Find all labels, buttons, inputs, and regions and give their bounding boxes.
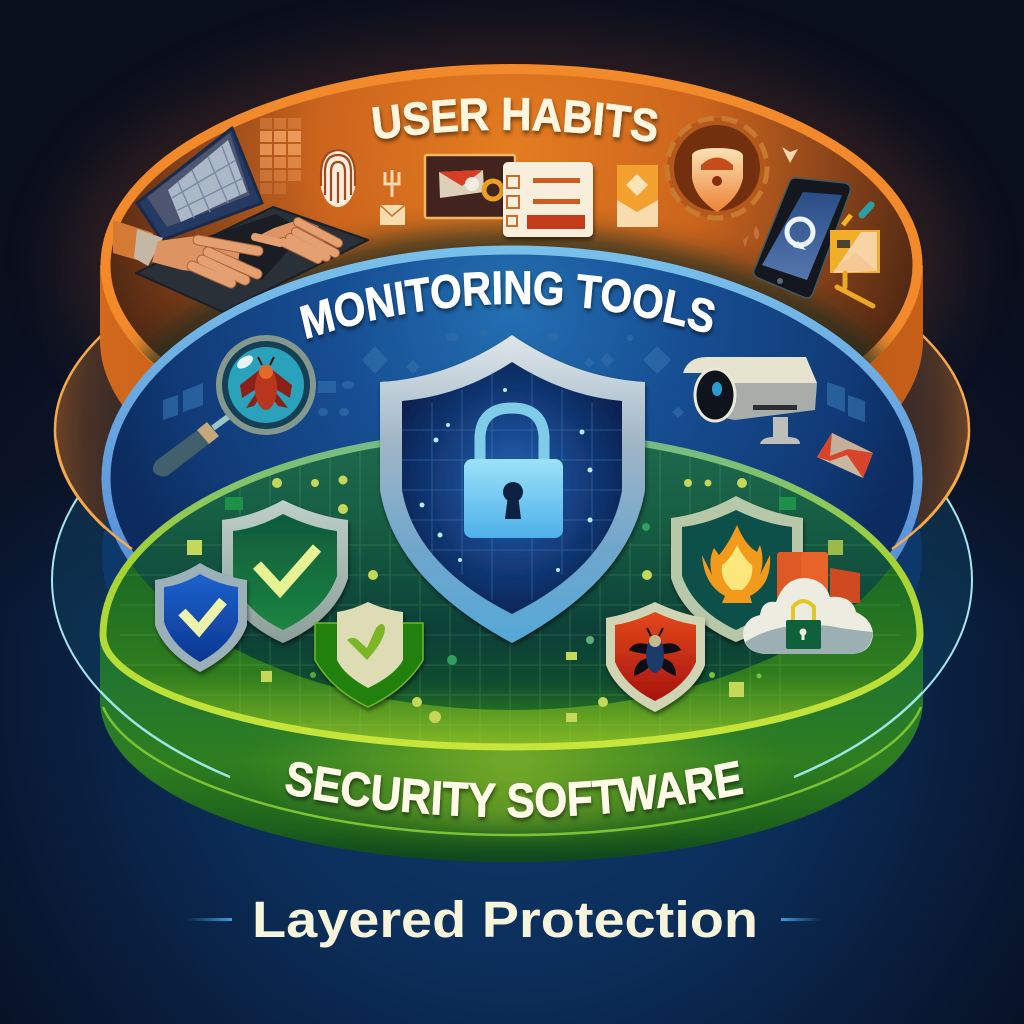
teal outer ring	[52, 330, 972, 830]
icon: security camera	[683, 357, 817, 444]
icon: cloud lock	[743, 578, 873, 654]
green disc rim	[103, 433, 920, 747]
icon: form card	[503, 162, 593, 237]
orange disc top	[106, 69, 918, 461]
wall glow	[232, 720, 792, 830]
icon: red envelope	[817, 433, 873, 478]
icon: laptop and hands	[113, 128, 368, 312]
icon: small cactus	[385, 170, 399, 197]
layer: security software	[100, 440, 924, 862]
icon: fingerprint	[320, 149, 356, 207]
wall inner line	[103, 707, 921, 835]
orange ring arcs over blue disc	[56, 440, 968, 549]
shield rim	[380, 335, 645, 643]
heading: security software: SECURITY SOFTWARE	[285, 760, 746, 823]
green disc top	[106, 447, 916, 744]
shadow of blue disc	[131, 214, 893, 364]
title: Layered Protection	[252, 891, 758, 948]
green disc wall	[100, 635, 923, 862]
icon: yellow envelope and tools	[743, 205, 880, 306]
layer: user habits	[100, 64, 923, 405]
icon: keypad grid	[260, 118, 301, 194]
icon: firewall shield	[671, 496, 803, 642]
icon: central padlock shield	[380, 335, 645, 643]
icon: magnifier with bug	[153, 338, 313, 476]
teal ring arcs over green wall	[100, 691, 923, 777]
icon: green check shield	[222, 500, 348, 643]
data dots	[187, 476, 843, 723]
orange disc wall	[100, 265, 923, 541]
icon: firewall bricks	[777, 552, 860, 603]
blue disc top	[106, 250, 918, 706]
icon: red bug shield	[606, 602, 705, 712]
icon: photo mail card	[425, 155, 515, 218]
layer: monitoring tools	[102, 246, 922, 594]
orange outer ring	[55, 215, 969, 645]
padlock	[464, 408, 563, 538]
circuit grid	[120, 440, 900, 750]
circuit dots	[420, 388, 592, 572]
shield grid	[402, 372, 622, 600]
icon: blue check shield	[155, 563, 247, 672]
icon: cream check shield on green crest	[315, 602, 423, 707]
blue disc wall	[102, 321, 922, 785]
icon: smartphone	[754, 178, 850, 298]
heading: user habits: USER HABITS	[371, 98, 660, 148]
icon: profile card	[617, 165, 658, 227]
icon: lock badge	[667, 118, 767, 218]
decorative data shapes	[163, 330, 865, 422]
icon: small envelope	[380, 205, 405, 225]
icon: flame	[702, 525, 770, 603]
icon: arrow mark	[782, 147, 798, 163]
shield face	[402, 362, 622, 614]
heading: monitoring tools: MONITORING TOOLS	[300, 270, 717, 344]
